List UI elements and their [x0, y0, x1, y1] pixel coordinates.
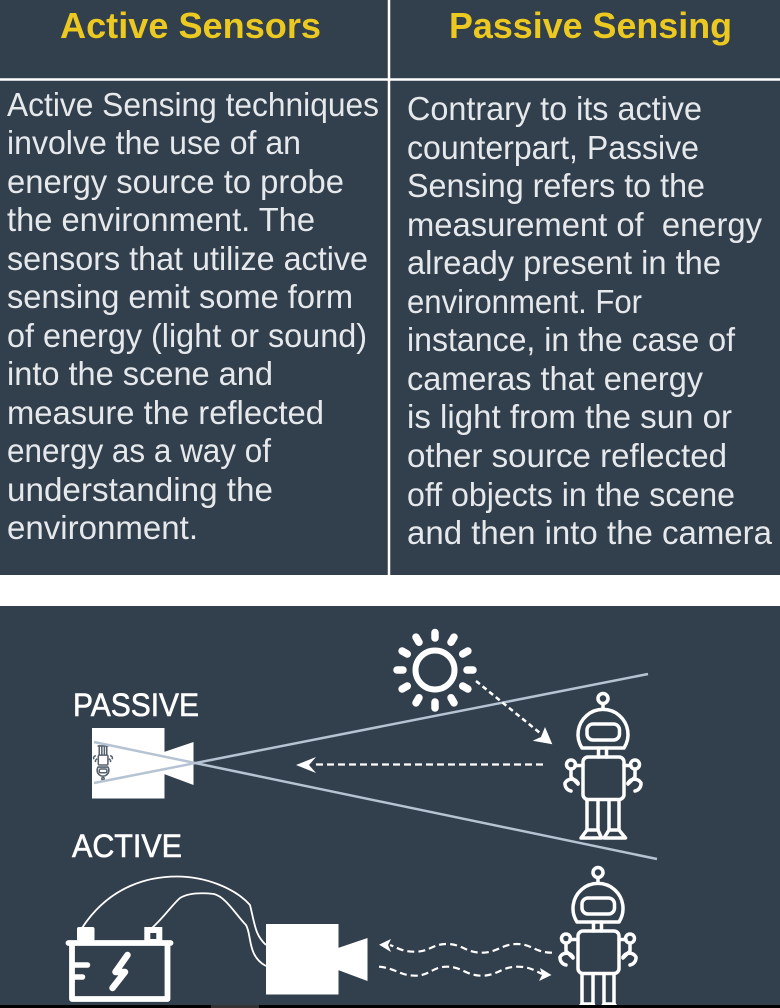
text block: active sensing description: the environment. The [7, 201, 315, 238]
icon: passive camera [92, 728, 194, 798]
icon: passive robot [565, 694, 641, 838]
text block: active sensing description: Active Sensing techniques [7, 86, 379, 123]
text block: passive sensing description [407, 90, 773, 551]
label: ACTIVE: ACTIVE [72, 828, 182, 864]
text block: passive sensing description: is light from the sun or [407, 398, 732, 435]
text block: passive sensing description: cameras that energy [407, 360, 703, 397]
heading: Active Sensors: Active Sensors [60, 5, 321, 46]
text block: active sensing description: energy as a way of [7, 432, 272, 469]
arrow: reflected light to camera [296, 757, 543, 773]
text block: passive sensing description: other source reflected [407, 437, 727, 474]
text block: passive sensing description: counterpart, Passive [407, 129, 699, 166]
text block: passive sensing description: and then into the camera [407, 514, 773, 551]
icon: battery [68, 927, 170, 999]
panel: sensing diagram [0, 606, 780, 1008]
wires from battery to camera [82, 876, 266, 966]
text block: active sensing description: sensors that utilize active [7, 240, 368, 277]
text block: passive sensing description: off objects in the scene [407, 476, 735, 513]
text block: active sensing description: energy source to probe [7, 163, 344, 200]
text block: active sensing description: sensing emit some form [7, 278, 353, 315]
panel: comparison table [0, 0, 780, 575]
text block: active sensing description: measure the reflected [7, 394, 324, 431]
field of view lines [94, 674, 657, 859]
text block: active sensing description [7, 86, 379, 546]
text block: active sensing description: of energy (light or sound) [7, 317, 367, 354]
arrow: sunlight to robot [476, 681, 552, 744]
text block: passive sensing description: instance, in the case of [407, 321, 736, 358]
text block: active sensing description: involve the use of an [7, 124, 301, 161]
icon: inverted robot image inside camera [94, 746, 112, 780]
icon: sun [397, 632, 473, 708]
text block: passive sensing description: environment. For [407, 283, 642, 320]
text block: active sensing description: into the scene and [7, 355, 273, 392]
label: PASSIVE: PASSIVE [73, 687, 199, 723]
text block: active sensing description: environment. [7, 509, 198, 546]
arrow: emitted signal [379, 967, 552, 981]
text block: active sensing description: understanding the [7, 471, 273, 508]
arrow: reflected signal [379, 939, 552, 953]
text block: passive sensing description: Sensing refers to the [407, 167, 705, 204]
text block: passive sensing description: Contrary to its active [407, 90, 702, 127]
icon: active robot [560, 868, 636, 1008]
icon: active camera [266, 924, 368, 994]
text block: passive sensing description: measurement of energy [407, 206, 762, 243]
text block: passive sensing description: already present in the [407, 244, 721, 281]
heading: Passive Sensing: Passive Sensing [449, 5, 732, 46]
